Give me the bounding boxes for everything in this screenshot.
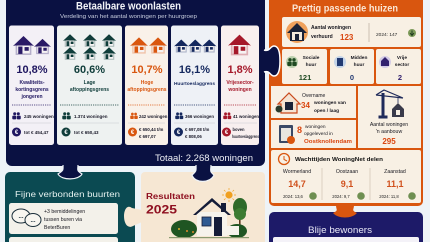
card: vrijesectorwoningen	[221, 26, 260, 145]
card: vrijesectorwoningen: €	[225, 130, 229, 136]
connector: navy knob	[58, 165, 82, 179]
card: wachttijden woningnet: Wormerland	[283, 169, 311, 175]
panel: betaalbare woonlasten	[6, 0, 265, 166]
card: bemiddelingen: BeterBuren	[44, 225, 70, 231]
card: midden huur: huur	[354, 62, 364, 68]
card: woningen in aanbouw: Aantal woningen	[370, 122, 408, 128]
card: lage aftoppingsgrens: €	[64, 130, 68, 136]
card: huurtoeslaggrens: Huurtoeslaggrens	[174, 81, 215, 87]
card: wachttijden woningnet: Wachttijden WoningNet delen	[295, 157, 384, 163]
card: woningen in aanbouw: 295	[382, 137, 396, 146]
card: lage aftoppingsgrens: tot € 650,43	[74, 130, 99, 135]
card: vrijesectorwoningen: huurtoeslaggrens	[232, 134, 260, 139]
card: hoge aftoppingsgrens	[125, 26, 168, 145]
card: woningen opgeleverd: woningen	[305, 124, 326, 130]
heading: blije bewoners: Blije bewoners	[308, 225, 373, 235]
icon: crane	[376, 90, 403, 118]
card: sociale huur: huur	[306, 62, 316, 68]
card: bemiddelingen: ...	[18, 214, 24, 220]
card: kwaliteitskortingsgrens: tot € 454,47	[24, 130, 49, 135]
heading: fijne verbonden buurten: Fijne verbonden buurten	[15, 189, 120, 199]
card: hoge aftoppingsgrens: aftoppingsgrens	[127, 87, 167, 93]
card: woningen in aanbouw	[358, 86, 421, 148]
card: huurtoeslaggrens: € 808,06	[185, 134, 202, 139]
card: vrije sector: 2	[398, 73, 402, 82]
card: hoge aftoppingsgrens: € 650,44 t/m	[139, 127, 164, 132]
card: wachttijden woningnet: Zaanstad	[384, 169, 406, 175]
subtitle: verdeling: Verdeling van het aantal woningen per huurgroep	[60, 14, 197, 20]
card: kwaliteitskortingsgrens: kortingsgrens	[15, 87, 49, 93]
panel: fijne verbonden buurten	[5, 165, 135, 242]
card: woningen in aanbouw: 'n aanbouw	[376, 129, 402, 135]
card: aantal woningen verhuurd: verhuurd	[311, 34, 333, 40]
card: overname woningen: Overname	[302, 93, 326, 99]
card: hoge aftoppingsgrens: Hoge	[141, 80, 153, 86]
card: aantal woningen verhuurd: 123	[340, 33, 354, 42]
card: wachttijden woningnet: 2024: 13,6	[283, 194, 304, 199]
card: kwaliteitskortingsgrens	[9, 26, 54, 145]
card: vrije sector	[376, 49, 421, 84]
card: huurtoeslaggrens: 366 woningen	[185, 114, 214, 119]
panel: resultaten 2025	[124, 165, 265, 242]
card: overname woningen: 34	[301, 101, 310, 110]
card: lage aftoppingsgrens	[57, 26, 122, 145]
card: kwaliteitskortingsgrens: jongeren	[20, 94, 43, 100]
card: vrijesectorwoningen: woningen	[227, 87, 252, 93]
heading: prettig passende huizen: Prettig passende huizen	[292, 4, 398, 14]
card: vrije sector: Vrije	[397, 55, 407, 61]
card: midden huur: Midden	[351, 55, 367, 61]
card: woningen opgeleverd	[271, 120, 356, 148]
card: bemiddelingen	[9, 203, 118, 234]
card: hoge aftoppingsgrens: €	[131, 130, 135, 136]
heading: betaalbare woonlasten: Betaalbare woonlasten	[76, 0, 181, 12]
card: kwaliteitskortingsgrens: 245 woningen	[24, 114, 54, 119]
card: wachttijden woningnet: 2024: 9,7	[332, 194, 350, 199]
card: kwaliteitskortingsgrens: Kwaliteits-	[19, 80, 45, 86]
card: huurtoeslaggrens	[171, 26, 218, 145]
card: midden huur: 0	[350, 73, 354, 82]
card: lage aftoppingsgrens: 60,6%	[74, 64, 105, 76]
card: kwaliteitskortingsgrens: 10,8%	[16, 64, 48, 76]
connector: cream knob	[124, 207, 142, 227]
card: bemiddelingen: tussen buren via	[44, 217, 82, 223]
card: overname woningen	[271, 86, 356, 118]
card: hoge aftoppingsgrens: 242 woningen	[139, 114, 168, 119]
card: vrijesectorwoningen: 41 woningen	[233, 114, 259, 119]
card: wachttijden woningnet: 11,1	[386, 179, 404, 189]
card: wachttijden woningnet: Oostzaan	[336, 169, 358, 175]
card: sociale huur: Sociale	[303, 55, 320, 61]
card: aantal woningen verhuurd: Aantal woningen	[311, 25, 351, 31]
card: huurtoeslaggrens: € 697,08 t/m	[185, 127, 210, 132]
panel: prettig passende huizen	[269, 0, 423, 206]
card: sociale huur: 121	[299, 73, 311, 82]
card: wachttijden woningnet: 9,1	[341, 179, 353, 189]
total: Totaal: 2.268 woningen	[155, 153, 253, 164]
card: vrijesectorwoningen: 1,8%	[227, 64, 253, 76]
card: woningen opgeleverd: 8	[297, 125, 302, 135]
card: vrijesectorwoningen: boven	[232, 127, 245, 132]
card: midden huur	[330, 49, 374, 84]
card: overname woningen: open / laag	[314, 108, 339, 114]
card: lage aftoppingsgrens: 1.374 woningen	[74, 114, 108, 119]
card: aantal woningen verhuurd: 2024: 147	[376, 32, 398, 38]
card: vrije sector: sector	[395, 62, 409, 68]
card: hoge aftoppingsgrens: 10,7%	[131, 64, 163, 76]
card: vrijesectorwoningen: Vrijesector-	[226, 80, 254, 86]
connector: navy knob to orange panel	[264, 46, 280, 76]
connector: orange knob	[333, 205, 357, 218]
heading: 2025: 2025	[146, 204, 178, 216]
card: aantal woningen verhuurd	[282, 17, 421, 47]
card: bemiddelingen: +3 bemiddelingen	[44, 209, 85, 215]
heading: resultaten: Resultaten	[146, 192, 195, 201]
card: hoge aftoppingsgrens: € 697,07	[139, 134, 156, 139]
card: sociale huur	[282, 49, 327, 84]
card: wachttijden woningnet	[271, 150, 421, 203]
card: wachttijden woningnet: 2024: 11,8	[379, 194, 399, 199]
card: huurtoeslaggrens: €	[177, 130, 181, 136]
card: woningen opgeleverd: Oostknollendam	[304, 139, 353, 145]
connector: navy knob	[192, 165, 214, 181]
card: overname woningen: woningen van	[313, 100, 346, 106]
card: kwaliteitskortingsgrens: €	[15, 130, 19, 136]
panel: blije bewoners	[269, 205, 423, 242]
card: woningen opgeleverd: opgeleverd in	[304, 131, 333, 137]
card: bemiddelingen: ...	[30, 218, 36, 224]
illustration: house with garden	[169, 188, 249, 238]
card: huurtoeslaggrens: 16,1%	[179, 64, 210, 76]
card: lage aftoppingsgrens: Lage	[84, 80, 96, 86]
card: lage aftoppingsgrens: aftoppingsgrens	[70, 87, 109, 93]
card: wachttijden woningnet: 14,7	[288, 179, 306, 189]
